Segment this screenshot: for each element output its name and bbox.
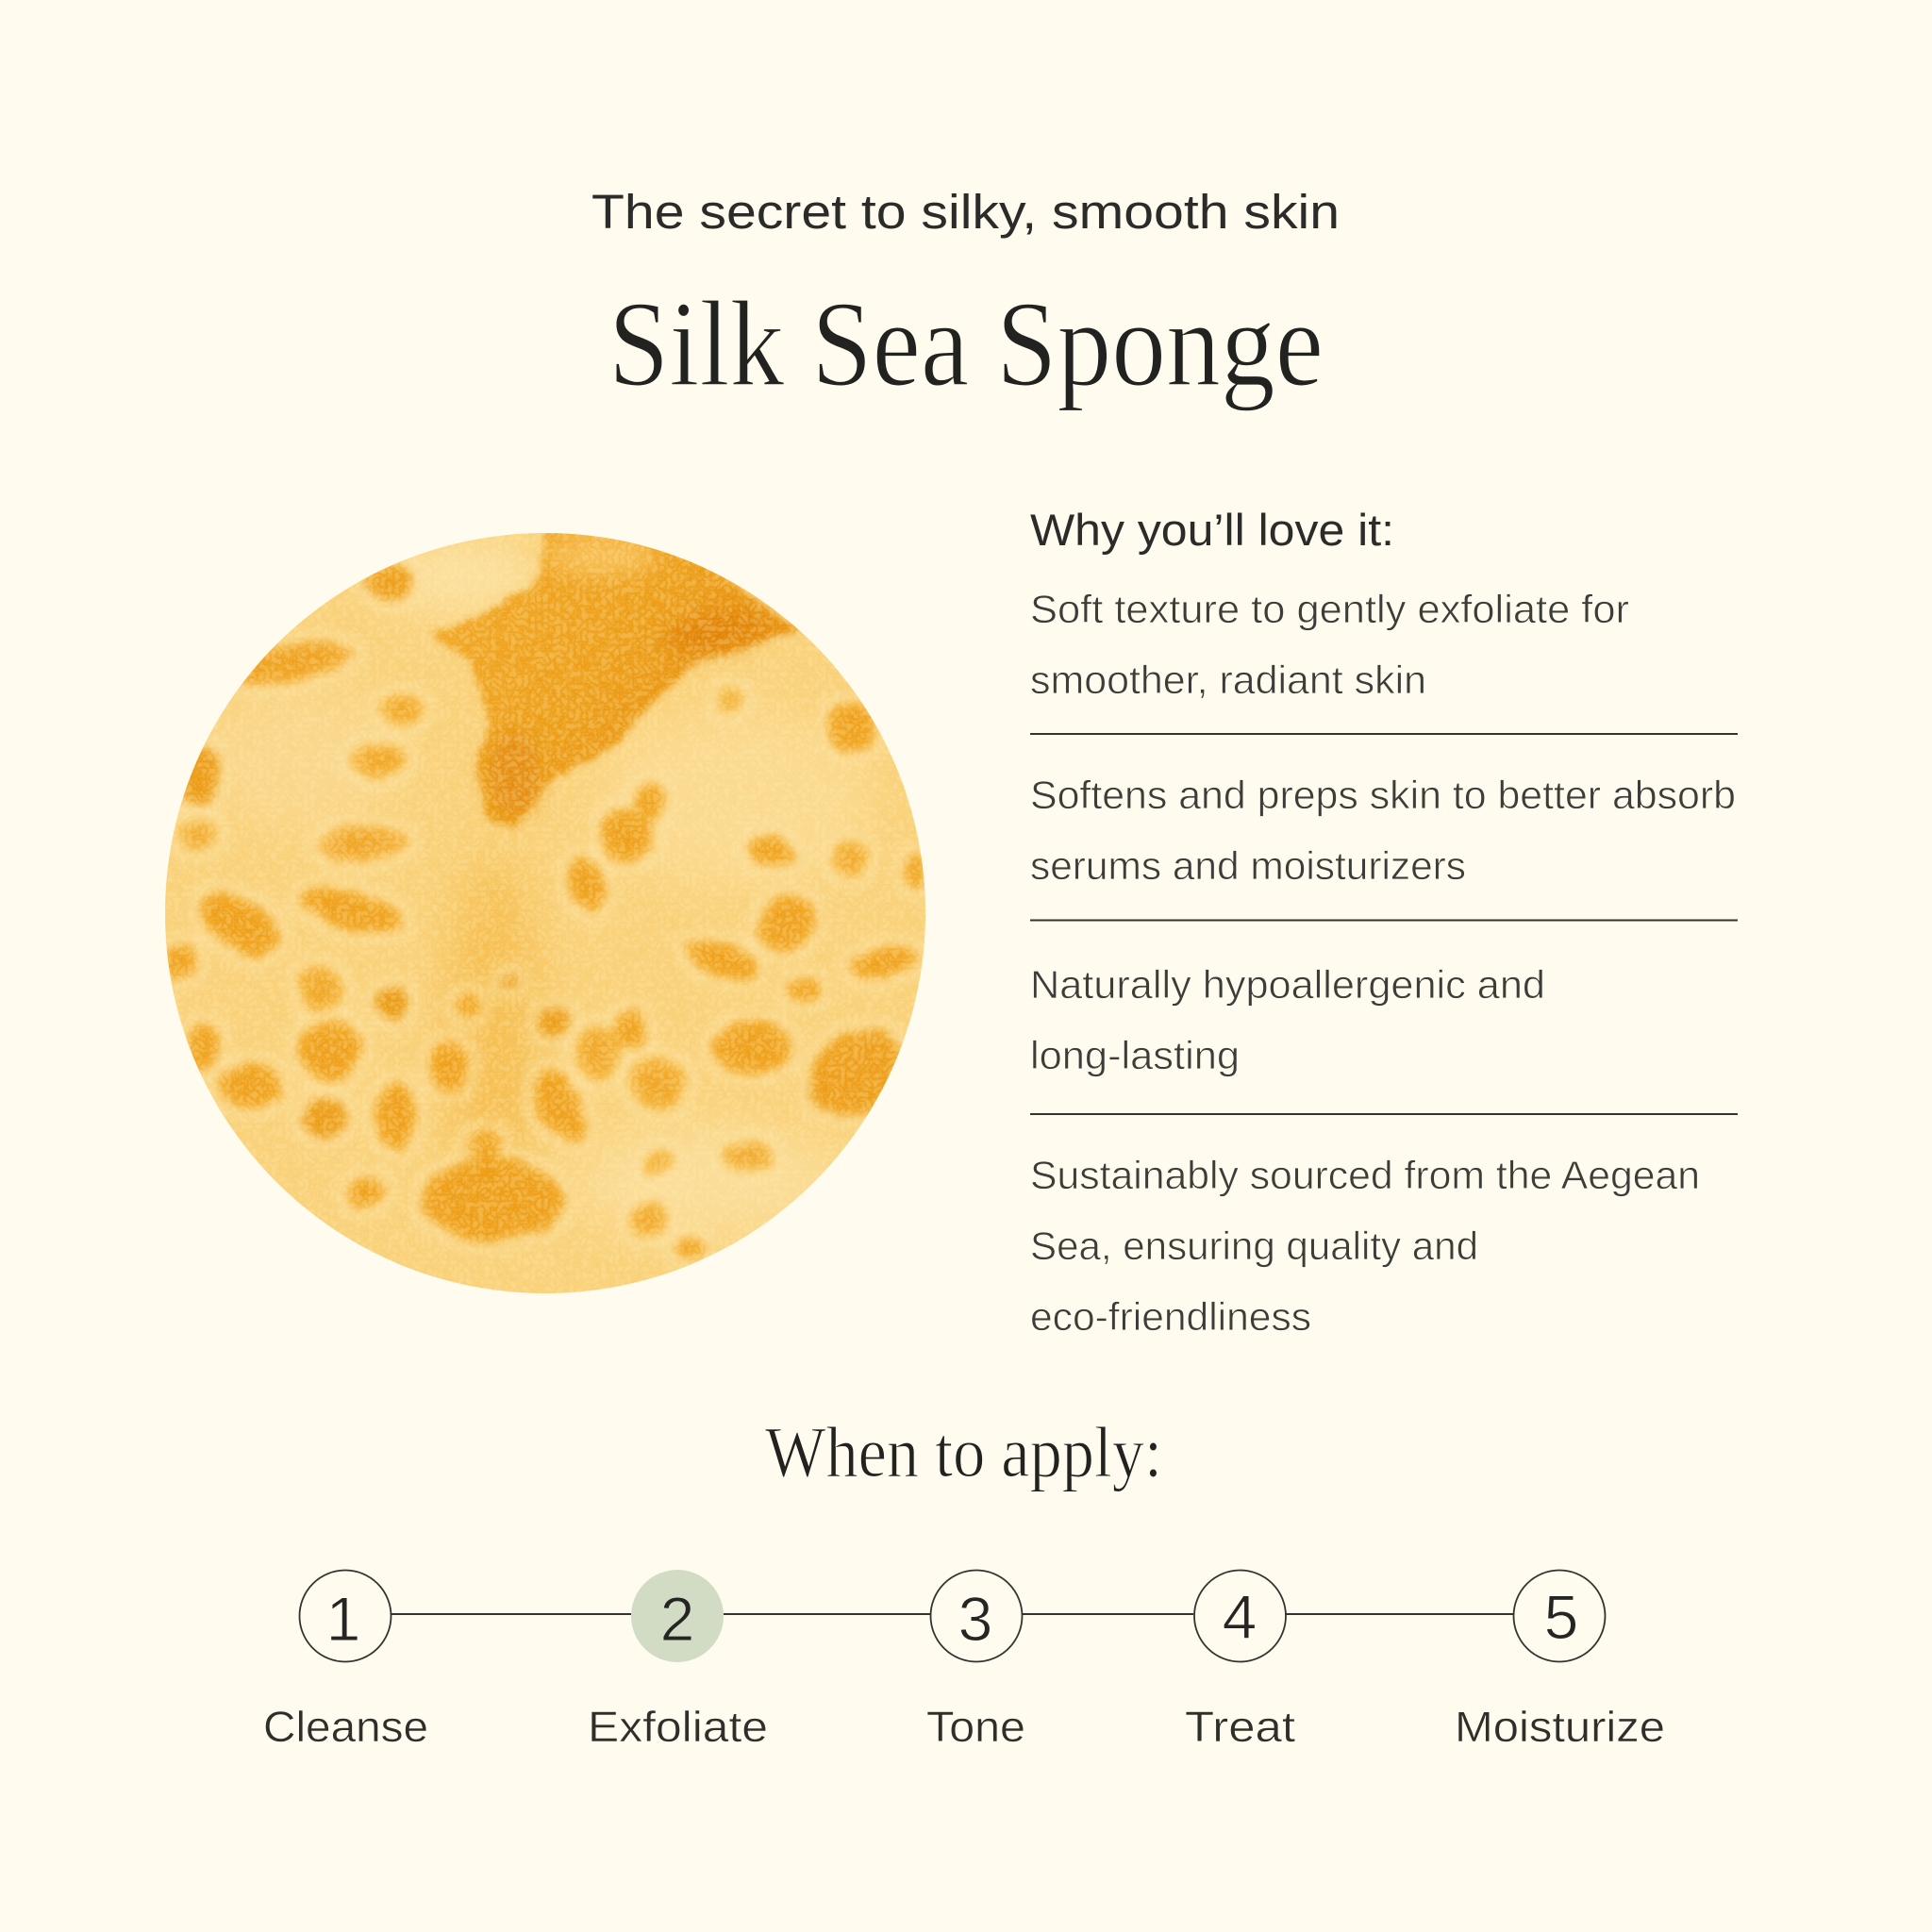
step 4: treat: 4 [1223, 1582, 1257, 1652]
panel: why you'll love it [1030, 505, 1738, 1339]
step 3: tone: 3 [958, 1584, 992, 1654]
benefit 2 text: Softens and preps skin to better absorb [1030, 773, 1736, 817]
benefit 4 text: Sustainably sourced from the Aegean [1030, 1153, 1700, 1197]
photo: sponge close-up circle [142, 509, 953, 1321]
benefit 4 text: Sea, ensuring quality and [1030, 1224, 1478, 1268]
shading variations [204, 541, 871, 1239]
benefit 3 text [1030, 962, 1545, 1077]
benefit 2 text [1030, 773, 1736, 888]
step 4: treat: Treat [1185, 1703, 1296, 1751]
heading: why you'll love it: Why you’ll love it: [1030, 505, 1394, 555]
benefit 1 text: Soft texture to gently exfoliate for [1030, 587, 1629, 631]
step 2: exfoliate (highlighted) [588, 1570, 768, 1751]
heading: when to apply: When to apply: [765, 1413, 1162, 1492]
benefit 3 text: Naturally hypoallergenic and [1030, 962, 1545, 1007]
benefit 1 text [1030, 587, 1629, 702]
benefit 4 text: eco-friendliness [1030, 1294, 1311, 1339]
benefit 1 text: smoother, radiant skin [1030, 658, 1426, 702]
sponge pores [162, 564, 927, 1259]
step 1: cleanse: 1 [326, 1584, 360, 1654]
step 2: exfoliate (highlighted): 2 [660, 1584, 694, 1654]
step 1: cleanse [263, 1570, 428, 1751]
step 5: moisturize: 5 [1544, 1582, 1578, 1652]
subtitle: The secret to silky, smooth skin [591, 185, 1340, 239]
fibrous texture [165, 533, 925, 1293]
title: Silk Sea Sponge [608, 276, 1324, 412]
step 4: treat [1185, 1570, 1296, 1751]
step 5: moisturize: Moisturize [1455, 1703, 1665, 1751]
step 5: moisturize [1455, 1570, 1665, 1751]
benefit 3 text: long-lasting [1030, 1033, 1240, 1077]
timeline: routine steps [263, 1570, 1665, 1751]
benefit 4 text [1030, 1153, 1700, 1339]
benefit 2 text: serums and moisturizers [1030, 843, 1466, 888]
step 2: exfoliate (highlighted): Exfoliate [588, 1703, 768, 1751]
shadowed cavity at top [431, 530, 799, 827]
step 1: cleanse: Cleanse [263, 1703, 428, 1751]
step 3: tone [926, 1570, 1025, 1751]
step 3: tone: Tone [926, 1703, 1025, 1751]
